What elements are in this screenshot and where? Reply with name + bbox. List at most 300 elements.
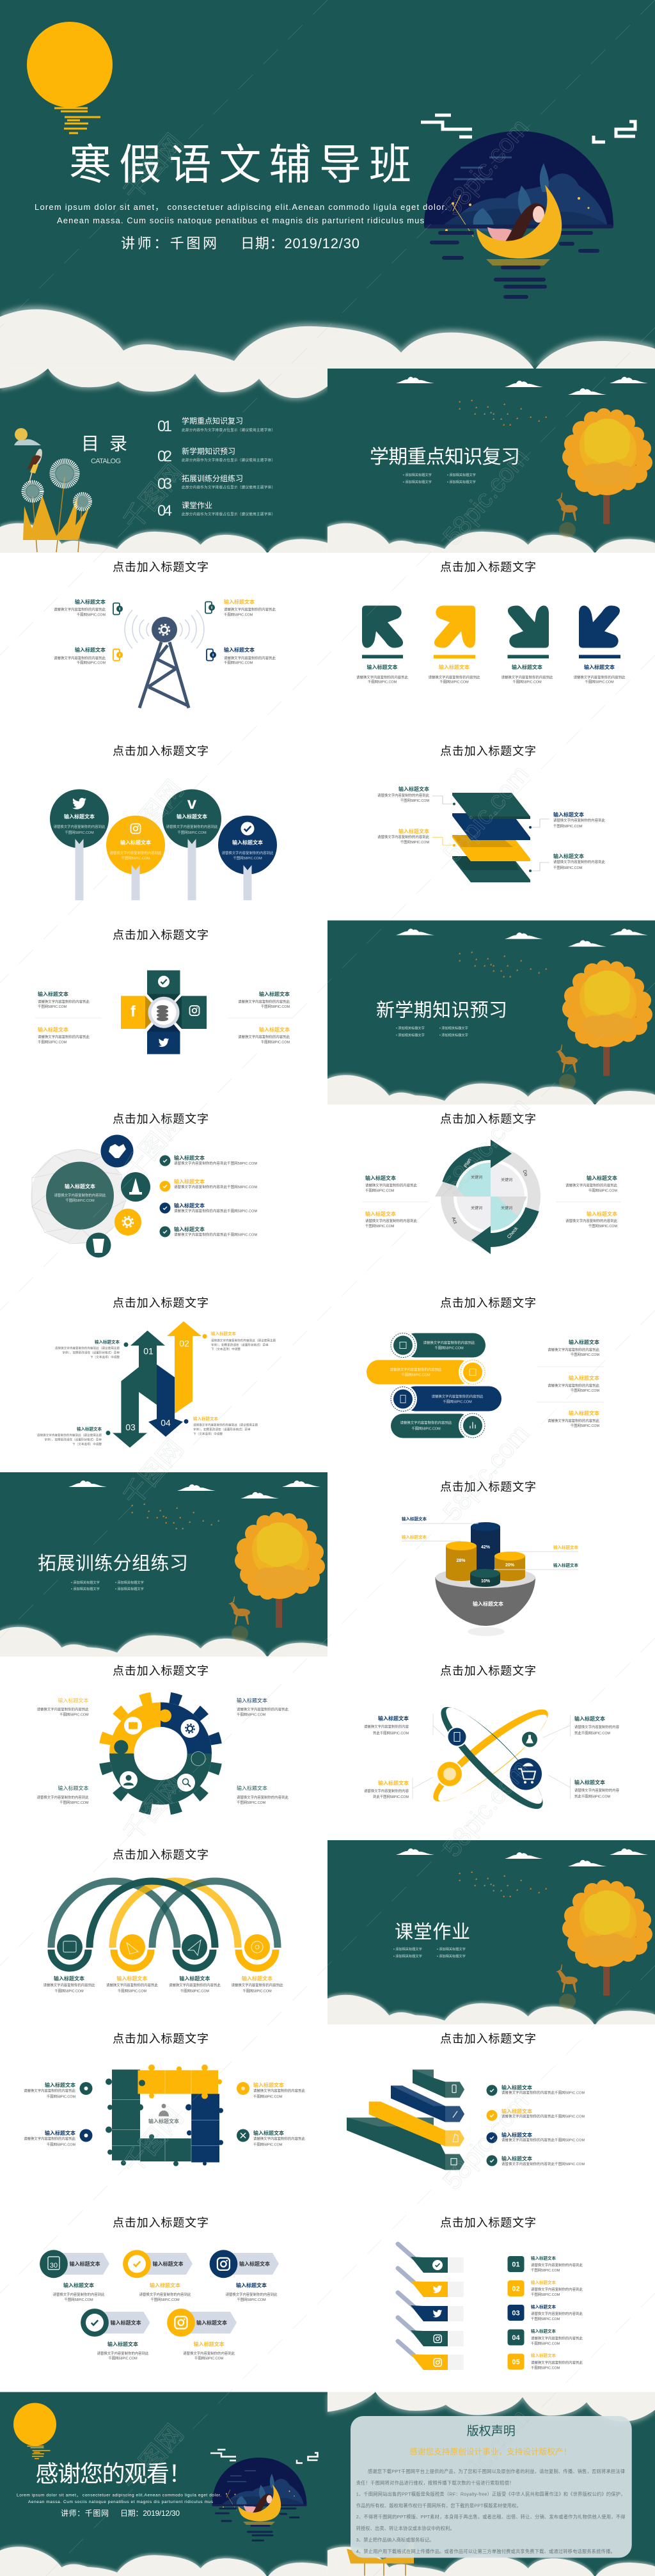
chart: PDCA cycle: Act [450,1216,459,1225]
bottom clouds [0,521,328,553]
watermarks: 58pic.com [438,1093,534,1200]
pill 4 [391,1411,487,1440]
panel: cross diagram slide [35,929,292,1054]
watermarks: 千图网 [118,2103,189,2180]
chart: PDCA cycle [435,1140,534,1254]
text: top right: 请替换文字内容复制你的内容到此 [224,607,276,612]
pill 4: 千图网58PIC.COM [411,1426,441,1431]
text: upper right with leader: 输入标题文本 [553,811,584,818]
heading: 点击加入标题文字 [440,2032,536,2045]
catalog list: 此部分内容作为文字排版占位显示（建议使用主题字体） [182,457,275,463]
chart: network circles: 请替换文字内容复制你的内容到此 [54,1193,106,1198]
pill 2: 千图网58PIC.COM [401,1372,430,1377]
list: numbered items: 请替换文字内容复制你的内容到此 [531,2311,583,2316]
list: numbered items: 请替换文字内容复制你的内容到此 [531,2262,583,2268]
panel: section 4 divider [328,1840,655,2025]
text: bottom right [224,646,276,665]
tag 2: 输入标题文本 [153,2261,184,2267]
list: numbered items: 输入标题文本 [531,2328,556,2334]
bullet labels: • 添加相关标题文字 [393,1946,422,1952]
text: bottom right: 输入标题文本 [224,646,255,653]
lollipop 1 [50,790,109,900]
text: top right: 到此千图网58PIC.COM [574,1730,611,1735]
bullet labels: • 添加相关标题文字 [71,1586,100,1591]
text: four corners: 千图网58PIC.COM [237,1712,266,1717]
lecturer and date: 讲师：千图网 [61,2508,109,2518]
text: four captions: 请替换文字内容复制你的内容到此 [232,1982,283,1987]
text: four corners: 输入标题文本 [58,1697,88,1703]
illustration: fairy and dandelions [14,428,90,552]
panel: PDCA slide [363,1113,621,1254]
text: right: 请替换文字内容复制你的内容到此 [238,1034,290,1039]
panel: cylinders slide [402,1481,578,1636]
watermarks: 千图网 [118,1770,189,1847]
catalog list: 02 [157,448,172,465]
list: four items: 输入标题文本 [174,1226,205,1232]
panel: stairs slide [347,2032,585,2170]
list: four items [160,1154,257,1237]
panel: thanks slide [0,2392,328,2576]
chart: crossing arrows: 04 [161,1418,171,1428]
subtitle text: Aenean massa. Cum sociis natoque penatibus et magnis dis parturient ridiculus mus [57,216,425,225]
text: right [237,2082,305,2147]
bullet labels: • 添加相关标题文字 [403,472,432,477]
chart: network circles [31,1135,150,1258]
chart: PDCA cycle: Check [506,1225,519,1239]
text: four captions [43,1975,283,1994]
bottom clouds [328,1993,655,2025]
text: four captions: 输入标题文本 [367,664,398,671]
chart: PDCA cycle: 关键词 [501,1205,512,1211]
chart: atom orbits [424,1696,557,1820]
subtitle text: Lorem ipsum dolor sit amet， consectetuer adipiscing elit.Aenean commodo ligula eget dolor. [17,2493,221,2498]
list: numbered items: 请替换文字内容复制你的内容到此 [531,2287,583,2292]
text: right: 请替换文字内容复制你的内容到此 [253,2088,305,2094]
panel: brushes slide [398,2216,583,2370]
pill 1 [389,1331,485,1359]
card paragraphs: 转授权、出卖、转让本协议或本协议中的权利。 [356,2525,455,2531]
heading: 点击加入标题文字 [113,745,209,758]
text: 04: 请替换文字内容复制你的内容到此（建议使用主题 [193,1423,258,1427]
text: bottom left: 请替换文字内容复制你的内容 [364,1788,409,1793]
text: four captions: 请替换文字内容复制你的内容到此 [429,674,480,680]
tag 3: 输入标题文本 [239,2261,270,2267]
text: four corners: 请替换文字内容复制你的内容到此 [37,1795,89,1800]
text: top left [54,599,106,617]
bullet labels: • 添加相关标题文字 [393,1953,422,1959]
text: right: 输入标题文本 [253,2082,284,2088]
panel: pills slide [367,1296,604,1440]
bullet labels: • 添加相关标题文字 [403,479,432,484]
text: 03 [37,1426,110,1446]
card paragraphs: 责任！千图网将对作品进行维权，按照传播下载次数的十倍进行索取赔偿！ [356,2480,514,2486]
lollipop 4: 请替换文字内容复制你的内容到此 [222,850,274,855]
chart: network circles: 千图网58PIC.COM [65,1198,95,1203]
list: numbered items: 04 [512,2334,520,2342]
tag 1: 30 [50,2262,58,2270]
card paragraphs: 感谢您下载PPT千图网平台上提供的产品，为了您和千图网以及原创作者的利益，请勿复制、传播、销售，否则将承担法律 [368,2469,625,2474]
text: right column: 请替换文字内容复制你的内容到此 [548,1383,600,1388]
text: left: 请替换文字内容复制你的内容到此 [38,999,90,1005]
brush 2 [398,2268,464,2297]
chart: puzzle frame: 输入标题文本 [148,2118,179,2124]
lollipop 2: 千图网58PIC.COM [121,855,150,861]
text: right: 千图网58PIC.COM [253,2094,283,2099]
list: numbered items: 输入标题文本 [531,2303,556,2310]
text: four captions: 千图网58PIC.COM [512,680,542,685]
text: four captions: 请替换文字内容复制你的内容到此 [169,1982,221,1987]
heading: 点击加入标题文字 [440,561,536,573]
text: four captions: 输入标题文本 [439,664,470,671]
subtitle text: Aenean massa. Cum sociis natoque penatibus et magnis dis parturient ridiculus mus [28,2500,214,2504]
bottom clouds [328,2545,655,2576]
illustration: tree deer birds clouds [396,928,652,1089]
labels with leader lines: 输入标题文本 [402,1534,427,1539]
text: top left: 到此千图网58PIC.COM [373,1730,409,1735]
chart: PDCA cycle: 关键词 [471,1175,482,1180]
chart: PDCA cycle: 关键词 [501,1177,512,1182]
lollipop 3 [162,790,221,900]
tag 3 [210,2250,279,2302]
text: top left with leader [377,786,455,805]
tag 5: 输入标题文本 [194,2341,225,2347]
card paragraphs: 4、禁止用户用下载格式在网上传播作品。或者作品可以让第三方单独付费或共享免费下载、或通过转移电话服务系统传播。 [356,2548,615,2554]
text: left: 请替换文字内容复制你的内容到此 [24,2088,76,2094]
bullet labels [396,1025,468,1038]
chart: overlapping arches [51,1881,278,1968]
text: left: 输入标题文本 [38,1026,68,1033]
lollipop 1: 输入标题文本 [64,813,95,820]
heading: 点击加入标题文字 [440,1481,536,1493]
list: four items: 输入标题文本 [501,2132,532,2138]
text: four captions: 千图网58PIC.COM [242,1989,272,1994]
panel: hero cover slide [0,0,655,370]
bullet labels: • 添加相关标题文字 [115,1580,144,1585]
bottom clouds [328,1074,655,1106]
list: numbered items: 01 [512,2261,520,2269]
list: numbered items: 请替换文字内容复制你的内容到此 [531,2360,583,2365]
text: lower right with leader: 输入标题文本 [553,853,584,859]
panel: tags slide [40,2216,279,2361]
text: four captions: 请替换文字内容复制你的内容到此 [43,1982,95,1987]
text: lower left with leader [377,828,455,847]
text: top right [224,599,276,617]
text: 01 [55,1339,128,1359]
text: left [363,1175,429,1228]
text: four captions: 千图网58PIC.COM [118,1989,147,1994]
watermarks: 千图网 [118,1108,189,1185]
text: left: 输入标题文本 [45,2082,75,2088]
list: four items: 请替换文字内容复制你的内容到此千图网58PIC.COM [501,2137,585,2142]
text: right: 千图网58PIC.COM [588,1223,618,1228]
text: top right [543,1715,620,1738]
text: 03: 下（文本选项）中调整 [72,1442,102,1446]
panel: signal tower slide [54,561,276,708]
lollipop 4 [218,816,277,900]
tag 5: 请替换文字内容复制你的内容到此 [183,2351,235,2356]
bullet labels: • 添加相关标题文字 [437,1946,466,1952]
chart: PDCA cycle: 关键词 [471,1205,482,1211]
tag 3: 请替换文字内容复制你的内容到此 [226,2292,278,2297]
bullet labels [71,1580,144,1591]
panel: stacked layers slide [377,745,605,882]
chart: crossing arrows: 03 [125,1422,136,1432]
list: four items: 请替换文字内容复制你的内容到此千图网58PIC.COM [174,1232,257,1237]
tag 1: 请替换文字内容复制你的内容到此 [53,2292,105,2297]
bars under arrows [362,655,620,658]
text: lower left with leader: 千图网58PIC.COM [400,839,430,845]
chart: crossing arrows: 02 [179,1339,189,1349]
pill 3: 请替换文字内容复制你的内容到此 [432,1394,484,1399]
lollipop 1: 请替换文字内容复制你的内容到此 [54,824,106,829]
text: top right: 千图网58PIC.COM [224,612,253,617]
text: right: 请替换文字内容复制你的内容到此 [238,999,290,1005]
list: four items: 请替换文字内容复制你的内容到此千图网58PIC.COM [501,2114,585,2119]
text: bottom left: 输入标题文本 [378,1780,409,1786]
tag 2: 输入标题文本 [150,2282,180,2288]
text: 02: 下（文本选项）中调整 [211,1347,241,1351]
watermarks: 千图网 [118,129,189,206]
list: numbered items: 输入标题文本 [531,2255,556,2261]
text: bottom right: 请替换文字内容复制你的内容到此 [224,655,276,660]
panel: puzzle slide [24,2032,305,2167]
text: four captions: 千图网58PIC.COM [180,1989,210,1994]
text: lower right with leader: 千图网58PIC.COM [553,865,583,870]
clouds, moon and illustration [0,2403,328,2576]
watermarks: 58pic.com [438,443,534,551]
title: 寒假语文辅导班 [69,141,411,188]
list: four items: 输入标题文本 [501,2085,532,2091]
text: bottom right: 到此千图网58PIC.COM [574,1794,611,1799]
text: left: 请替换文字内容复制你的内容到此 [365,1182,417,1188]
text: bottom left [54,646,106,665]
chart: cylinders in bowl: 42% [481,1545,491,1550]
bullet labels: • 添加相关标题文字 [437,1953,466,1959]
labels with leader lines: 输入标题文本 [553,1545,578,1550]
tag 2: 千图网58PIC.COM [150,2297,180,2302]
watermarks: 58pic.com [438,760,534,868]
bullet labels: • 添加相关标题文字 [439,1033,468,1038]
chart: network circles: 输入标题文本 [65,1183,95,1189]
text: right column [537,1339,604,1428]
text: left: 千图网58PIC.COM [365,1223,395,1228]
bullet labels: • 添加相关标题文字 [447,472,476,477]
list: numbered items [508,2255,583,2370]
text: bottom right: 千图网58PIC.COM [224,660,253,665]
card paragraphs [356,2469,625,2554]
text: four captions: 输入标题文本 [242,1975,272,1982]
text: 02: 请替换文字内容复制你的内容到此（建议使用主题 [211,1339,276,1342]
heading: 点击加入标题文字 [113,1665,209,1678]
text: left: 千图网58PIC.COM [47,2142,76,2147]
lecturer and date: 日期：2019/12/30 [120,2509,180,2518]
text: lower right with leader [529,853,605,872]
catalog list: 此部分内容作为文字排版占位显示（建议使用主题字体） [182,512,275,517]
tag 4: 输入标题文本 [111,2319,141,2326]
text: left: 千图网58PIC.COM [365,1188,395,1193]
text: four captions: 千图网58PIC.COM [439,680,469,685]
list: numbered items: 05 [512,2358,520,2366]
text: four captions: 输入标题文本 [179,1975,210,1982]
text: 02: 字体），如需更改请在（设置形状格式）菜单 [211,1342,269,1348]
text: top left with leader: 请替换文字内容复制你的内容到此 [377,793,430,798]
text: left [24,2082,92,2147]
text: bottom left: 千图网58PIC.COM [77,660,106,665]
icon: full moon and swirl clouds [27,22,635,142]
chart: cylinders in bowl: 20% [505,1563,515,1568]
text: four corners: 请替换文字内容复制你的内容到此 [237,1707,288,1712]
card subtitle: 感谢您支持原创设计事业，支持设计版权产！ [409,2447,571,2456]
card paragraphs: 作品的所有权、版权和著作权归千图网所有，您下载的是PPT模版素材使用权。 [356,2503,521,2508]
lollipop 3: 千图网58PIC.COM [177,830,207,835]
section title: 新学期知识预习 [376,999,507,1021]
text: bottom right: 输入标题文本 [574,1779,605,1785]
panel: lollipop slide [50,745,277,900]
text: right: 请替换文字内容复制你的内容到此 [253,2136,305,2141]
watermarks: 58pic.com [438,2405,534,2512]
list: numbered items: 千图网58PIC.COM [531,2268,560,2273]
catalog list: 拓展训练分组练习 [182,473,243,483]
heading: 点击加入标题文字 [113,1296,209,1309]
text: right column: 输入标题文本 [569,1374,599,1381]
tag 4: 请替换文字内容复制你的内容到此 [97,2351,149,2356]
text: top left: 输入标题文本 [75,599,106,605]
text: right: 输入标题文本 [253,2129,284,2136]
panel: copyright slide [328,2392,655,2576]
text: bottom left [364,1777,433,1799]
panel: gear slide [37,1665,288,1810]
text: 02 [202,1331,276,1351]
text: four captions [356,664,626,685]
chart: cylinders in bowl: 输入标题文本 [473,1601,503,1607]
card paragraphs: 2、不得将千图网的PPT模版、PPT素材，本身用于再出售，或者出租、出借、转让、分销、发布或者作为礼物供他人使用，不得 [356,2514,625,2520]
text: top left: 请替换文字内容复制你的内容 [364,1724,409,1729]
subtitle text [17,2493,221,2504]
list: four items: 输入标题文本 [174,1202,205,1209]
text: four corners [37,1697,288,1805]
text: four corners: 千图网58PIC.COM [59,1800,89,1805]
pill 3: 千图网58PIC.COM [443,1399,472,1404]
bullet labels [403,472,476,484]
illustration: tree deer birds clouds [68,1481,325,1641]
chart: stacked layers [452,793,530,882]
list: numbered items: 请替换文字内容复制你的内容到此 [531,2335,583,2341]
panel: catalog slide [0,369,328,553]
chart: puzzle gear [104,1697,217,1810]
list: numbered items: 输入标题文本 [531,2352,556,2358]
heading: 点击加入标题文字 [440,1296,536,1309]
chart: cross: f [130,1003,136,1020]
text: right [556,1175,621,1228]
lollipop 1: 千图网58PIC.COM [65,830,94,835]
text: 02: 输入标题文本 [211,1331,237,1336]
icons: four round badges [57,1934,270,1960]
catalog list: 03 [157,475,172,493]
text: four corners: 千图网58PIC.COM [237,1800,266,1805]
tag 3: 输入标题文本 [236,2282,267,2288]
text: top right: 输入标题文本 [224,599,255,605]
brush 1 [398,2244,464,2273]
list: four items: 请替换文字内容复制你的内容到此千图网58PIC.COM [501,2090,585,2095]
text: top left: 千图网58PIC.COM [77,612,106,617]
text: right: 请替换文字内容复制你的内容到此 [565,1218,618,1223]
lecturer and date: 讲师：千图网 [121,235,217,251]
hero clouds [0,306,655,370]
brush 5 [398,2341,464,2370]
heading: 点击加入标题文字 [113,1849,209,1861]
text: lower left with leader: 请替换文字内容复制你的内容到此 [377,834,430,839]
lecturer and date: 日期：2019/12/30 [241,235,359,251]
lollipop 2 [106,816,165,900]
list: numbered items: 02 [512,2286,520,2293]
catalog heading [81,434,127,465]
text: right: 输入标题文本 [259,990,290,997]
text: left: 输入标题文本 [45,2129,75,2136]
labels with leader lines: 输入标题文本 [402,1516,427,1522]
tag 4: 输入标题文本 [107,2341,138,2347]
panel: circles slide [31,1113,257,1258]
panel: atom slide [364,1665,620,1820]
subtitle text: Lorem ipsum dolor sit amet， consectetuer adipiscing elit.Aenean commodo ligula eget dolor. [35,202,447,212]
text: top right: 输入标题文本 [574,1715,605,1722]
tag 1: 输入标题文本 [70,2261,100,2267]
text: left [35,990,102,1044]
pill 1: 千图网58PIC.COM [434,1345,464,1350]
text: top left with leader: 千图网58PIC.COM [400,798,430,803]
heading: 点击加入标题文字 [113,1113,209,1125]
heading: 点击加入标题文字 [113,2032,209,2045]
text: left: 请替换文字内容复制你的内容到此 [24,2136,76,2141]
text: right column: 输入标题文本 [569,1410,599,1417]
list: four items: 请替换文字内容复制你的内容到此千图网58PIC.COM [174,1161,257,1166]
lollipop 3: v [187,793,197,813]
list: numbered items: 千图网58PIC.COM [531,2341,560,2346]
catalog list [157,416,275,520]
tag 5: 千图网58PIC.COM [194,2356,224,2361]
text: right [228,990,292,1044]
bullet labels: • 添加相关标题文字 [71,1580,100,1585]
text: right: 千图网58PIC.COM [253,2142,283,2147]
watermarks: 58pic.com [438,2088,534,2195]
list: numbered items: 千图网58PIC.COM [531,2292,560,2297]
heading: 点击加入标题文字 [440,745,536,758]
chart: cross [121,970,207,1054]
chart: cylinders in bowl: 28% [456,1559,466,1563]
text: four corners: 千图网58PIC.COM [59,1712,89,1717]
labels with leader lines: 输入标题文本 [553,1562,578,1568]
labels with leader lines [402,1516,578,1570]
text: four corners: 输入标题文本 [237,1785,267,1792]
text: right column: 请替换文字内容复制你的内容到此 [548,1418,600,1423]
text: top right: 请替换文字内容复制你的内容 [574,1724,620,1729]
text: four corners: 输入标题文本 [58,1785,88,1792]
tag 3: 千图网58PIC.COM [237,2297,266,2302]
list: numbered items: 千图网58PIC.COM [531,2365,560,2370]
text: lower right with leader: 请替换文字内容复制你的内容到此 [553,859,605,864]
text: left: 千图网58PIC.COM [47,2094,76,2099]
text: four captions: 千图网58PIC.COM [585,680,614,685]
watermarks: 千图网 [118,459,189,536]
panel: section 2 divider [328,920,655,1106]
copyright card [351,2416,632,2558]
tag 2 [123,2250,193,2302]
heading: 点击加入标题文字 [440,2216,536,2229]
bottom clouds [0,1625,328,1657]
section title: 学期重点知识复习 [370,447,520,468]
bullet labels: • 添加相关标题文字 [115,1586,144,1591]
catalog list: 此部分内容作为文字排版占位显示（建议使用主题字体） [182,485,275,490]
list: four items: 请替换文字内容复制你的内容到此千图网58PIC.COM [174,1184,257,1189]
